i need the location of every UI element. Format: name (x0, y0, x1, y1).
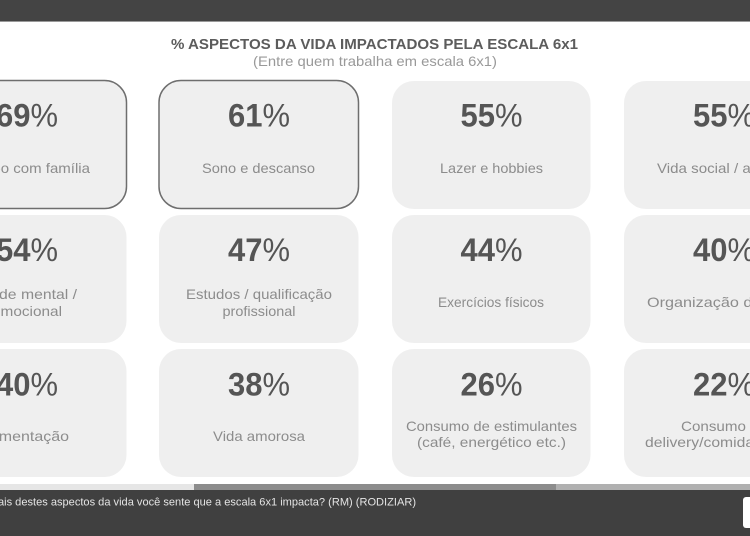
card: Tempo com família 69% (0, 80, 126, 208)
card: Vida amorosa 38% (159, 349, 358, 477)
top dark bar (0, 0, 750, 22)
card: Alimentação 40% (0, 349, 126, 477)
card: Exercícios físicos 44% (392, 215, 590, 343)
card: Lazer e hobbies 55% (392, 81, 590, 209)
card: Vida amorosa 38%: Vida amorosa (213, 428, 305, 444)
card: Lazer e hobbies 55%: 55% (460, 98, 522, 134)
card: Organização do tempo 40% (624, 215, 750, 343)
card: Estudos / qualificação profissional 47%: 47% (228, 232, 290, 268)
bottom dark bar (0, 490, 750, 536)
card: Consumo de estimulantes 26%: (café, energético etc.) (417, 434, 566, 450)
card: Consumo de estimulantes 26% (392, 349, 590, 477)
card: Exercícios físicos 44%: Exercícios físicos (438, 294, 544, 310)
card: Vida amorosa 38%: 38% (228, 366, 290, 402)
card: Vida social / amigos 55% (624, 81, 750, 209)
card: Estudos / qualificação profissional 47% (159, 215, 358, 343)
card: Consumo de estimulantes 26%: 26% (460, 366, 522, 402)
card: Consumo de estimulantes 26%: Consumo de estimulantes (406, 418, 577, 434)
card: Exercícios físicos 44%: 44% (460, 232, 522, 268)
white logo box (743, 497, 750, 528)
card: Estudos / qualificação profissional 47%: Estudos / qualificação (186, 286, 332, 302)
subtitle: (Entre quem trabalha em escala 6x1) (253, 53, 497, 69)
card: Lazer e hobbies 55%: Lazer e hobbies (440, 160, 543, 176)
card: Saúde mental / emocional 54% (0, 215, 126, 343)
progress strip (0, 484, 750, 490)
card: Sono e descanso 61%: Sono e descanso (202, 160, 315, 176)
title: % ASPECTOS DA VIDA IMPACTADOS PELA ESCALA 6x1 (171, 36, 578, 53)
card: Sono e descanso 61% (159, 80, 358, 208)
card: Sono e descanso 61%: 61% (228, 98, 290, 134)
card: Estudos / qualificação profissional 47%: profissional (222, 303, 296, 319)
card: Consumo de delivery/comida pronta 22% (624, 349, 750, 477)
